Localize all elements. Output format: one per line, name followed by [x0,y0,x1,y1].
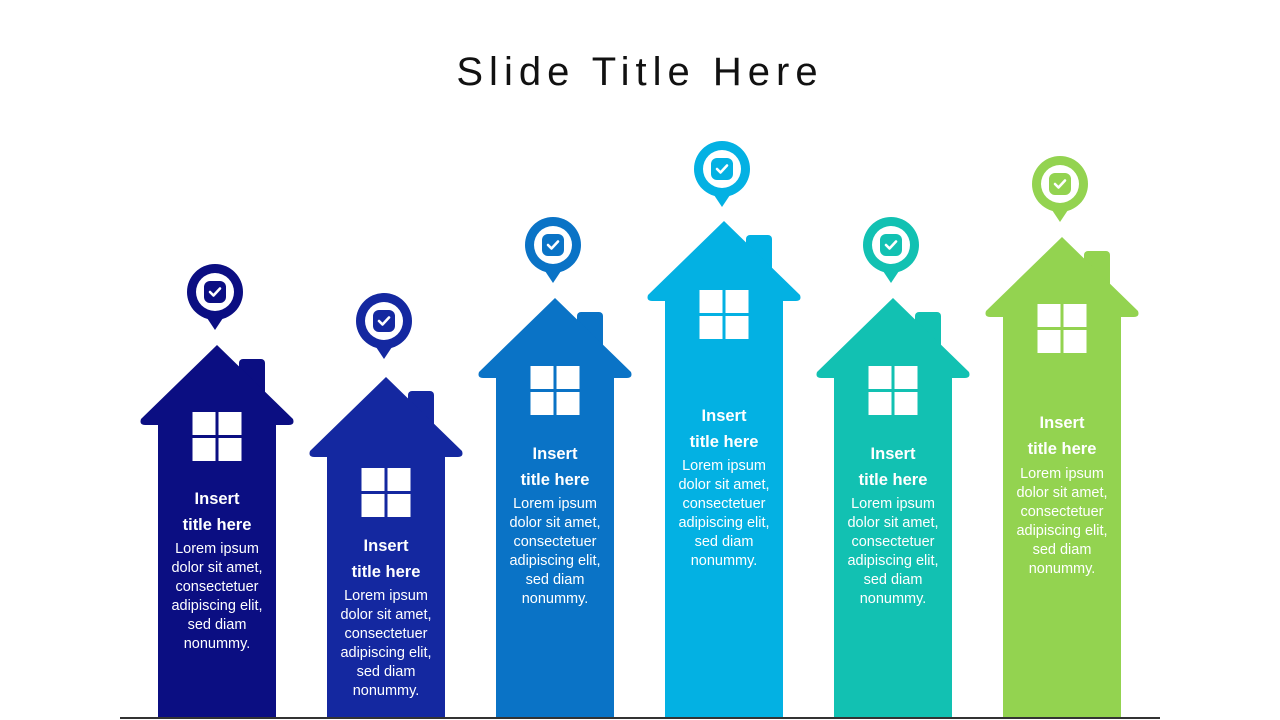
house 3: adipiscing elit, [509,553,601,569]
house 2: Lorem ipsum [344,588,428,604]
house 2: Insert [364,537,409,555]
house 4: consectetuer [682,496,766,512]
house 6: Lorem ipsum [1020,466,1104,482]
house 3: Insert [533,445,578,463]
house 3 [478,217,632,720]
house 3: title here [521,471,589,489]
house 5: title here [859,471,927,489]
house 6 [986,156,1138,720]
house 4 [648,141,800,720]
house 6: nonummy. [1029,561,1095,577]
house 4: Lorem ipsum [682,458,766,474]
house 1: adipiscing elit, [171,598,263,614]
house 1: dolor sit amet, [171,560,263,576]
house 1: nonummy. [184,636,250,652]
house 3: consectetuer [513,534,597,550]
house 5: Lorem ipsum [851,496,935,512]
house 4: sed diam [695,534,753,550]
house 1 [140,264,294,720]
house 1: title here [183,516,251,534]
house 5: sed diam [864,572,922,588]
house 5 [816,217,970,720]
house 2: title here [352,563,420,581]
title: Slide Title Here [456,50,824,94]
house 2: sed diam [357,664,415,680]
house 2: dolor sit amet, [340,607,432,623]
house 4: Insert [702,407,747,425]
house 4: nonummy. [691,553,757,569]
house 2: consectetuer [344,626,428,642]
house 5: nonummy. [860,591,926,607]
house 6: consectetuer [1020,504,1104,520]
house 6: sed diam [1033,542,1091,558]
house 6: dolor sit amet, [1016,485,1108,501]
house 1: sed diam [188,617,246,633]
house 6: adipiscing elit, [1016,523,1108,539]
house 2: nonummy. [353,683,419,699]
house 4: title here [690,433,758,451]
house 1: consectetuer [175,579,259,595]
house 3: dolor sit amet, [509,515,601,531]
house 1: Lorem ipsum [175,541,259,557]
house 5: consectetuer [851,534,935,550]
house 6: Insert [1040,414,1085,432]
house 4: dolor sit amet, [678,477,770,493]
house 3: Lorem ipsum [513,496,597,512]
house 5: Insert [871,445,916,463]
house 2: adipiscing elit, [340,645,432,661]
house 3: sed diam [526,572,584,588]
house 1: Insert [195,490,240,508]
house 6: title here [1028,440,1096,458]
house 5: adipiscing elit, [847,553,939,569]
house 4: adipiscing elit, [678,515,770,531]
house 5: dolor sit amet, [847,515,939,531]
house 2 [310,293,462,720]
house 3: nonummy. [522,591,588,607]
